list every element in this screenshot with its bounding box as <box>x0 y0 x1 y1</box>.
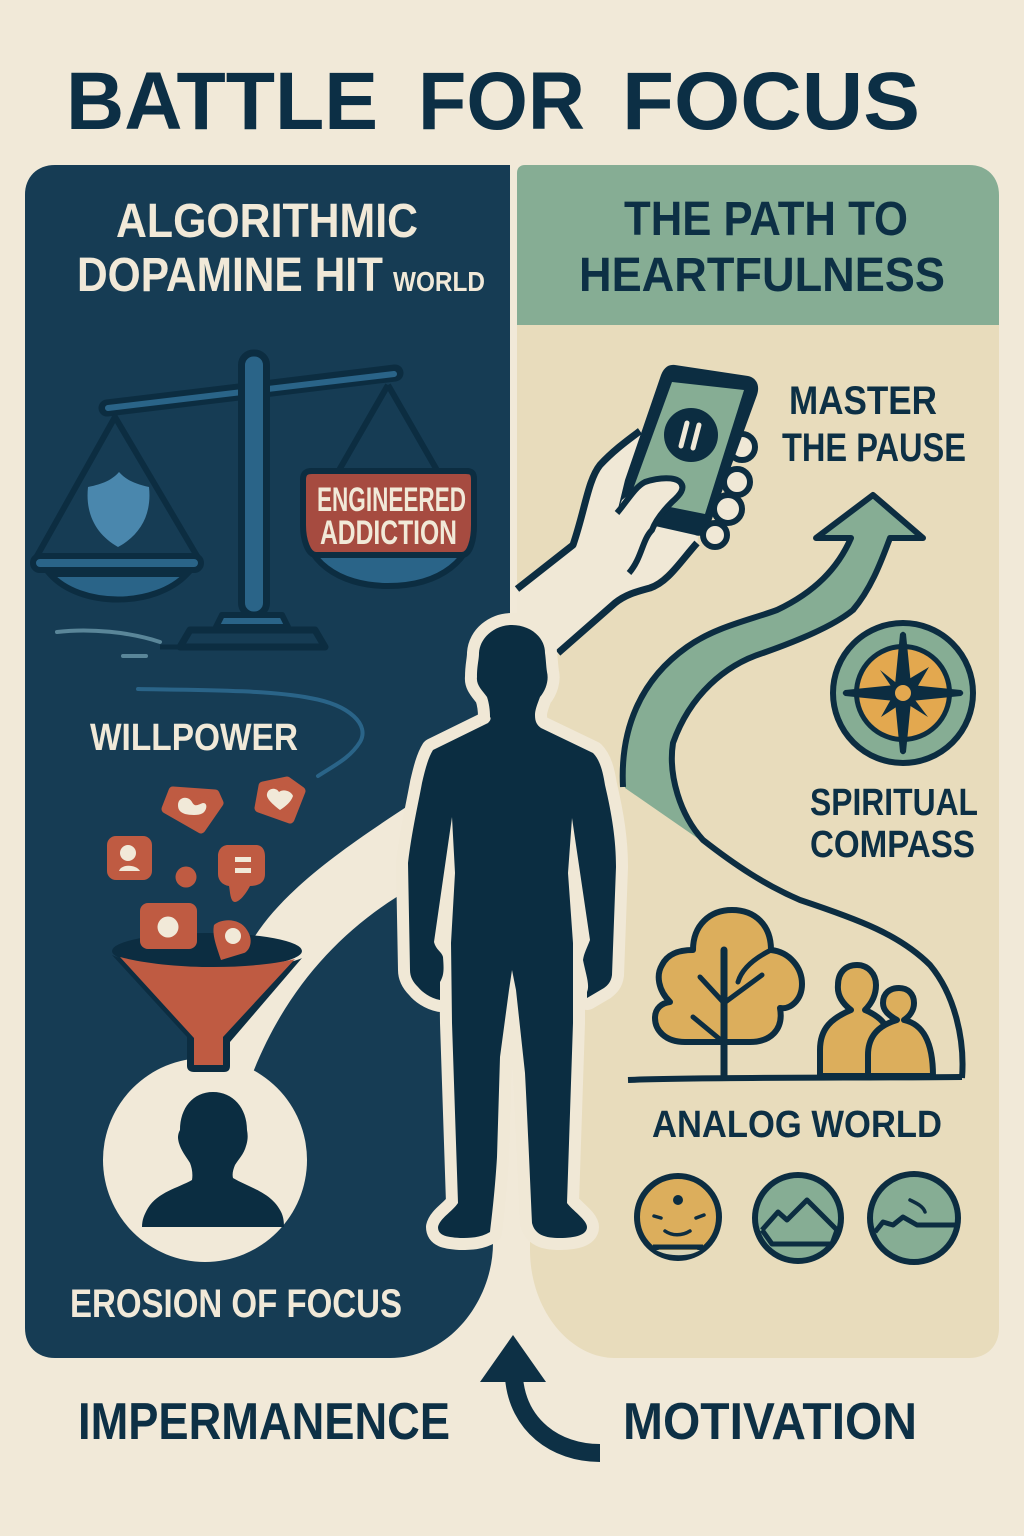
icon: funnel <box>112 933 302 1072</box>
heading: algorithmic world: DOPAMINE HIT <box>77 249 383 302</box>
profile icon <box>107 836 152 880</box>
right pan with engineered addiction sign: ADDICTION <box>320 514 457 552</box>
heart icon <box>166 791 219 829</box>
arrow: green path upward <box>623 495 963 1078</box>
heart icon right <box>259 781 301 819</box>
heading: path to heartfulness: THE PATH TO <box>624 193 908 246</box>
icon: mountain circle <box>755 1175 841 1261</box>
label: spiritual compass: SPIRITUAL <box>810 782 978 824</box>
icon: face circle <box>637 1176 719 1258</box>
icon: horizon circle <box>870 1174 958 1262</box>
fingers <box>724 469 750 495</box>
icon: social media icons <box>107 781 301 902</box>
panel: path to heartfulness <box>517 325 999 1358</box>
top finger <box>729 434 755 460</box>
label: master the pause: MASTER <box>789 379 937 423</box>
thumb <box>610 478 682 573</box>
hand <box>517 430 700 720</box>
icon: balance scale <box>33 353 474 647</box>
label: spiritual compass <box>810 782 978 866</box>
label: analog world: ANALOG WORLD <box>652 1104 942 1146</box>
left pan with shield <box>33 417 201 600</box>
title: BATTLE <box>66 56 378 147</box>
label: spiritual compass: COMPASS <box>810 824 975 866</box>
label: willpower: WILLPOWER <box>90 717 298 759</box>
panel: algorithmic world <box>25 165 510 1358</box>
heading: algorithmic world: WORLD <box>393 266 485 297</box>
phone <box>617 365 758 536</box>
scale post and base <box>160 353 325 647</box>
photo icon <box>140 903 197 949</box>
band from figure to funnel and head <box>180 802 414 1075</box>
label: erosion of focus: EROSION OF FOCUS <box>70 1282 402 1326</box>
icon: two people <box>820 965 933 1076</box>
title: FOR <box>418 56 585 147</box>
speech bubble icon <box>218 845 265 902</box>
heading: algorithmic world: ALGORITHMIC <box>116 195 418 248</box>
label: master the pause <box>782 379 966 470</box>
ground line <box>628 1077 962 1080</box>
icons falling into funnel <box>140 903 251 960</box>
heading: path to heartfulness: HEARTFULNESS <box>579 249 945 302</box>
icon: tree <box>655 910 802 1076</box>
icon: compass <box>833 623 973 763</box>
head circle: eroded focus <box>103 1058 307 1262</box>
right pan with engineered addiction sign <box>303 385 474 586</box>
title: FOCUS <box>622 56 920 147</box>
central figure <box>408 625 616 1238</box>
right pan with engineered addiction sign: ENGINEERED <box>317 481 466 519</box>
title <box>66 56 920 147</box>
pin icon <box>213 920 251 960</box>
scale beam <box>107 373 395 408</box>
heading: path to heartfulness <box>579 193 945 302</box>
heading: algorithmic world <box>77 195 485 302</box>
decorative wisps <box>57 630 160 656</box>
panel header: path to heartfulness <box>517 165 999 325</box>
label: impermanence: IMPERMANENCE <box>78 1393 450 1451</box>
dot <box>176 866 196 888</box>
icon: hand holding phone <box>517 365 758 720</box>
label: motivation: MOTIVATION <box>623 1393 917 1451</box>
arrow: motivation to figure <box>480 1335 600 1453</box>
label: master the pause: THE PAUSE <box>782 426 966 470</box>
